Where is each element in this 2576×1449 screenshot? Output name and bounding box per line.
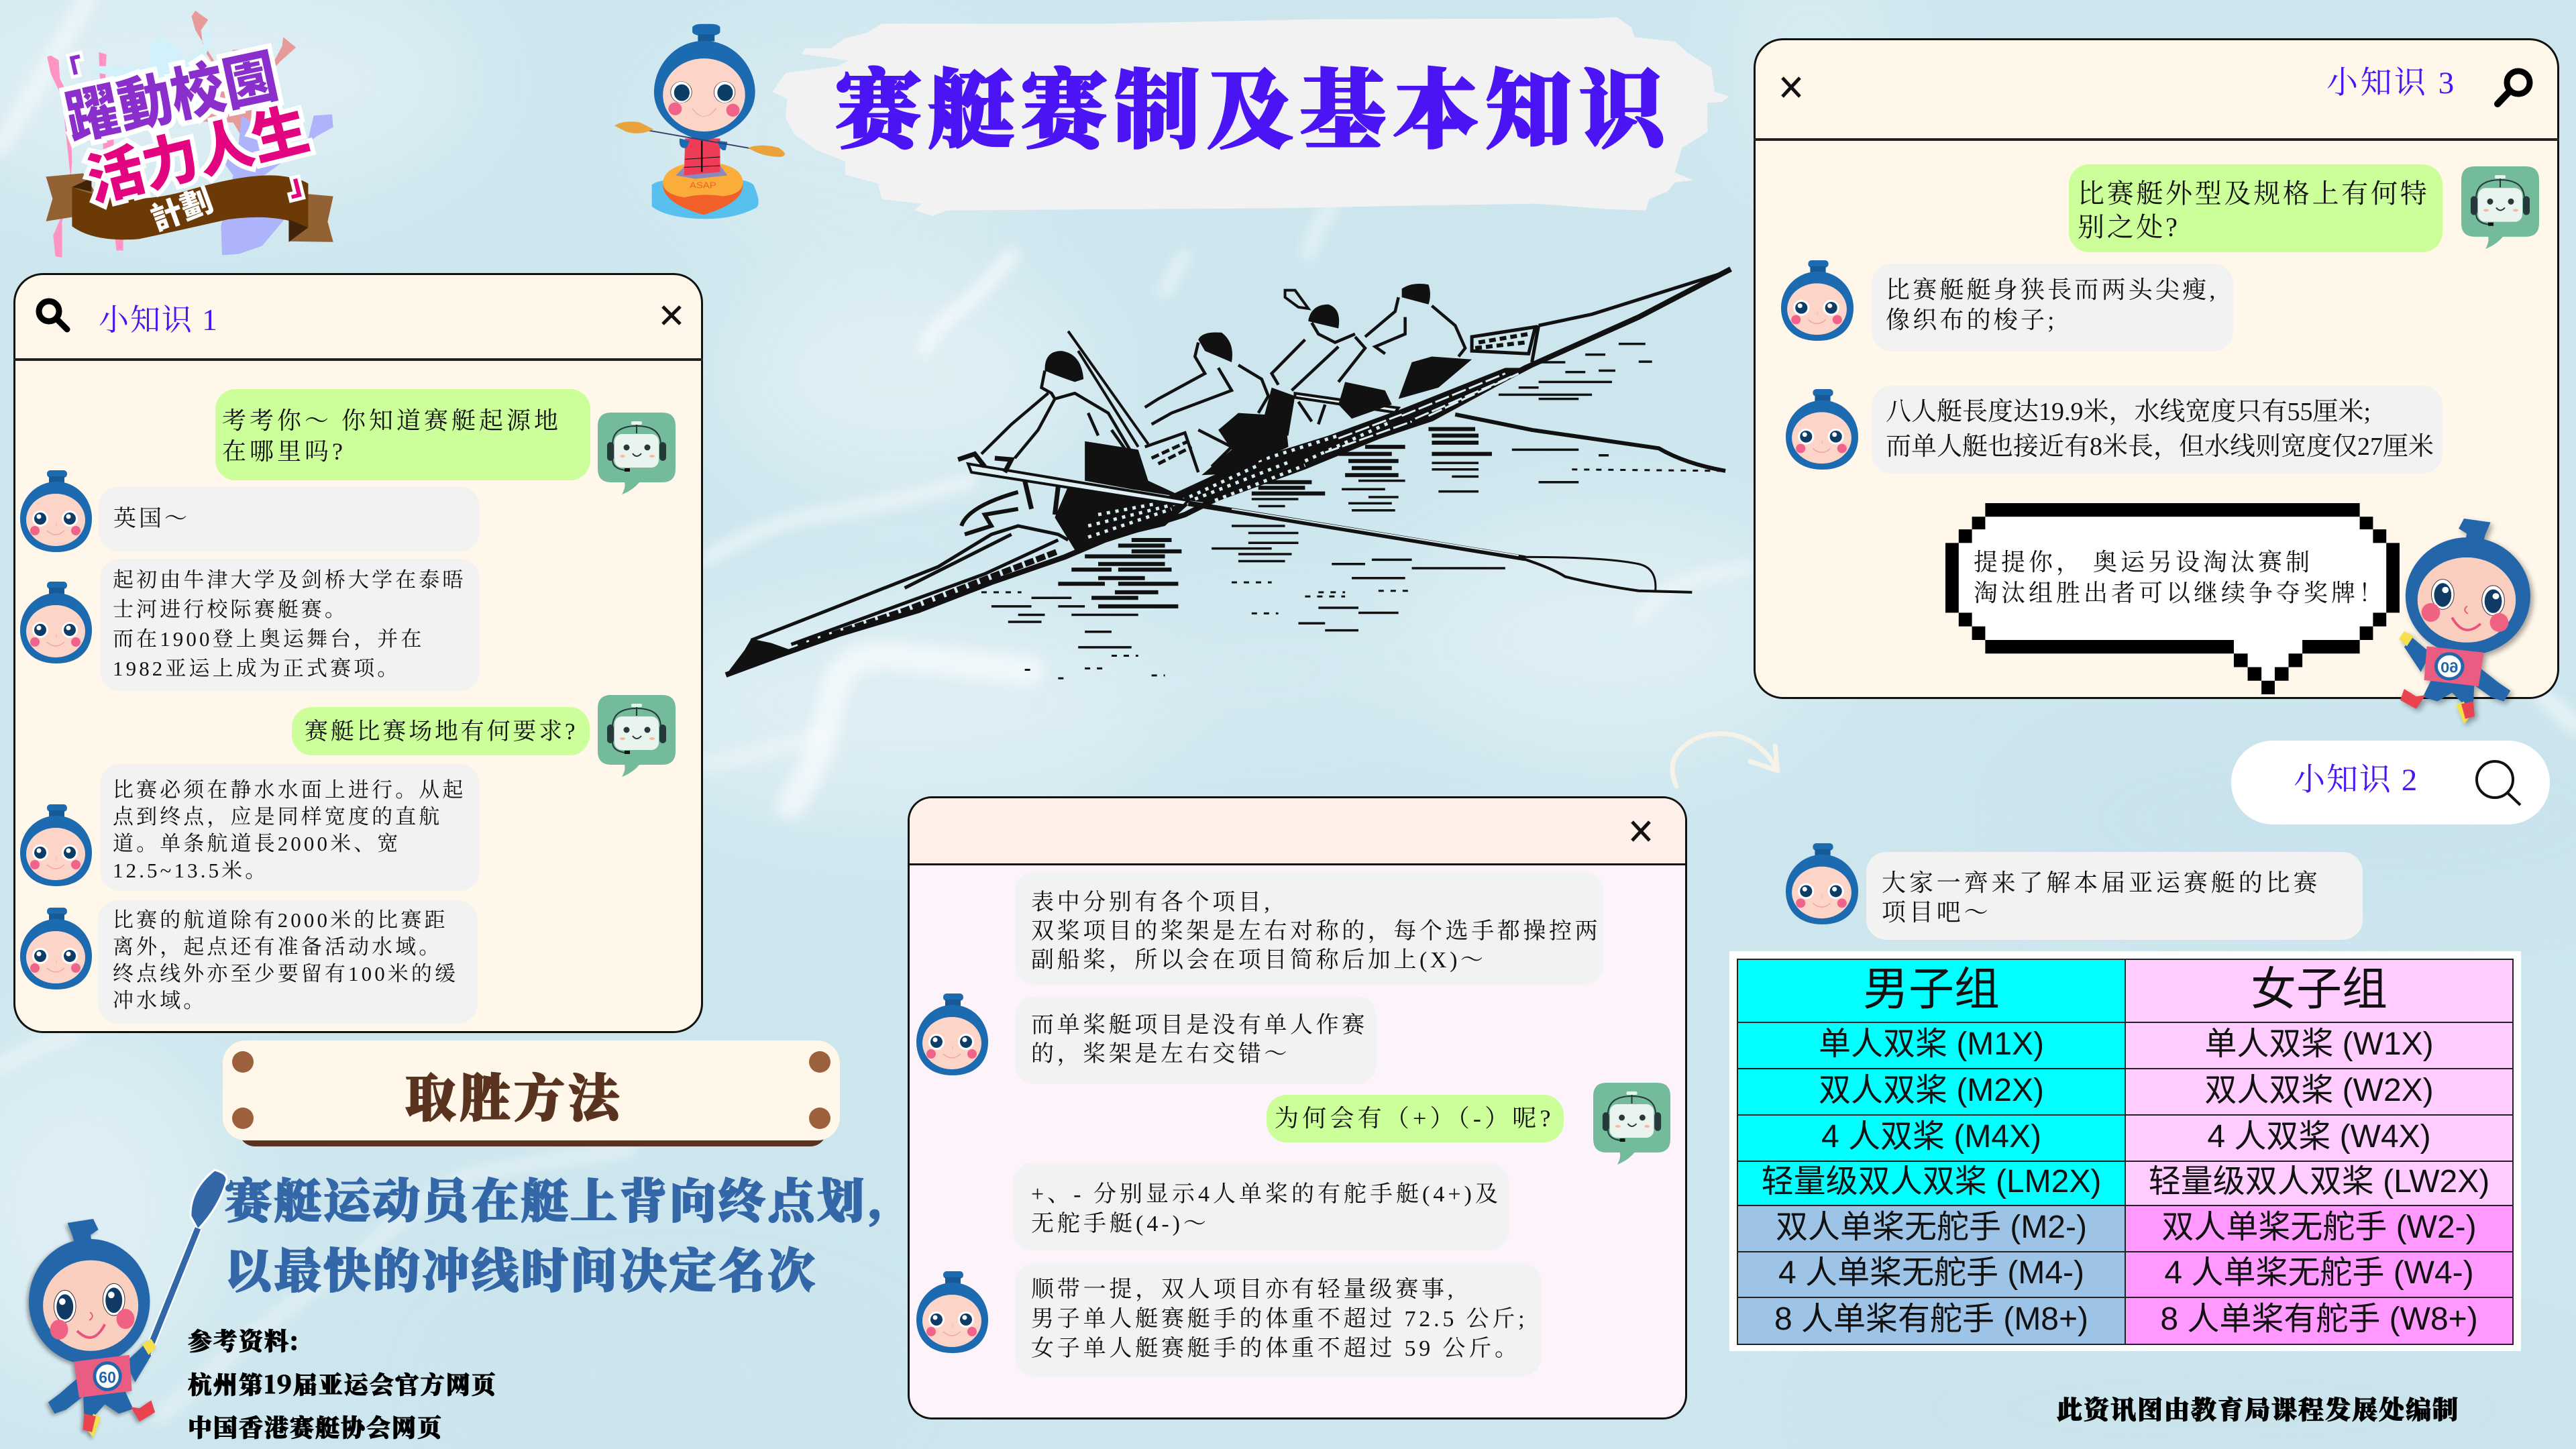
bubble: 轻量级: [1015, 1263, 1542, 1377]
panel: 取胜方法 heading plate: [223, 1040, 840, 1146]
rower 1: [958, 351, 1185, 515]
icon: avatar 1: [1781, 260, 1854, 341]
icon: avatar 1: [20, 470, 92, 552]
icon: kayak mascot: ASAP: [690, 180, 716, 191]
table: events by group: 双人单桨无舵手 (W2-): [2161, 1209, 2477, 1245]
water ripples far: [991, 344, 1652, 647]
answer bubble history: [100, 559, 480, 691]
bubble: 轻量级: 女子单人艇赛艇手的体重不超过 59 公斤。: [1031, 1336, 1521, 1361]
question bubble: 别之处?: [2078, 212, 2180, 242]
bubble: 有舵手: 无舵手艇(4-)～: [1031, 1212, 1210, 1236]
table: events by group: 女子组: [2251, 964, 2387, 1015]
bubble: 双桨: 副船桨，所以会在项目简称后加上(X)～: [1031, 948, 1487, 973]
table: events by group: 4 人单桨无舵手 (M4-): [1778, 1255, 2084, 1291]
logo opening bracket: 「: [51, 54, 87, 92]
logo closing bracket: 」: [284, 164, 321, 203]
answer bubble distance: 冲水域。: [113, 989, 207, 1012]
logo: 躍動校園 活力人生 計劃: [46, 11, 333, 258]
text: 赛艇运动员 statement: [225, 1163, 885, 1303]
table: events by group: 4 人双桨 (W4X): [2207, 1119, 2431, 1154]
heading: 小知识 3: 小知识 3: [2326, 66, 2457, 101]
bubble: 单桨: 的，桨架是左右交错～: [1031, 1042, 1290, 1067]
rower 3: [1258, 305, 1392, 439]
icon: search: [2493, 68, 2534, 107]
plate body: [223, 1040, 840, 1140]
logo ribbon text: 計劃: [146, 182, 217, 237]
title: 赛艇赛制及基本知识: [835, 42, 1672, 165]
question bubble: 比赛艇外型及规格上有何特: [2078, 178, 2429, 209]
question bubble 1: 考考你～ 你知道赛艇起源地: [222, 407, 561, 434]
answer bubble 英国: [99, 486, 480, 551]
plate shadow bar: [239, 1108, 826, 1146]
table: events by group: 4 人单桨无舵手 (W4-): [2164, 1255, 2474, 1291]
window header: [910, 798, 1685, 865]
answer bubble course: 道。单条航道長2000米、宽: [113, 832, 400, 855]
header divider: [13, 358, 703, 361]
bubble: 单桨: 而单桨艇项目是没有单人作赛: [1031, 1013, 1368, 1038]
text: references: 中国香港赛艇协会网页: [188, 1409, 443, 1444]
answer bubble distance: 终点线外亦至少要留有100米的缓: [113, 962, 458, 985]
icon: close: [1779, 75, 1803, 99]
bubble: 双桨: 表中分别有各个项目,: [1031, 890, 1273, 915]
answer bubble course: 点到终点，应是同样宽度的直航: [113, 805, 442, 828]
heading: 小知识 1: 小知识 1: [99, 303, 219, 337]
credit line: 此资讯图由教育局课程发展处编制: [2057, 1389, 2459, 1426]
table: events by group: 轻量级双人双桨 (LM2X): [1762, 1164, 2101, 1199]
logo line 1: 躍動校園: [60, 44, 283, 152]
bubble: table intro: 项目吧～: [1882, 899, 1992, 926]
text: references: 杭州第19届亚运会官方网页: [188, 1366, 497, 1401]
answer bubble history: 而在1900登上奥运舞台，并在: [113, 627, 424, 651]
icon: avatar 4: [20, 908, 92, 989]
answer bubble history: 1982亚运上成为正式赛项。: [113, 657, 400, 680]
answer bubble distance: 比赛的航道除有2000米的比赛距: [113, 908, 448, 932]
icon: kayak mascot: [614, 24, 785, 219]
rower 2: [1145, 332, 1289, 475]
table: events by group: 单人双桨 (M1X): [1819, 1026, 2044, 1061]
answer bubble history: 起初由牛津大学及剑桥大学在泰晤: [113, 568, 466, 592]
text: 赛艇运动员 statement: 赛艇运动员在艇上背向终点划,: [225, 1164, 885, 1232]
answer bubble course: 比赛必须在静水水面上进行。从起: [113, 778, 466, 802]
answer bubble course: [100, 764, 480, 891]
runner mascot: [29, 1219, 158, 1439]
table: events by group: [1729, 951, 2521, 1351]
table: events by group: 单人双桨 (W1X): [2204, 1026, 2434, 1061]
answer bubble distance: 离外，起点还有准备活动水域。: [113, 935, 442, 959]
heading: 小知识 2: 小知识 2: [2294, 763, 2418, 798]
icon: avatar 1: [916, 994, 988, 1075]
table: events by group: 双人双桨 (M2X): [1819, 1072, 2044, 1108]
question bubble: 为何会有（+）（-）呢?: [1275, 1105, 1554, 1132]
icon: avatar 3: [20, 804, 92, 886]
question bubble 1: [215, 389, 590, 480]
rower 4: [1365, 284, 1472, 399]
table: events by group: 8 人单桨有舵手 (M8+): [1774, 1301, 2088, 1337]
plate heading: 取胜方法: [405, 1058, 623, 1131]
answer bubble shape: 比赛艇艇身狭長而两头尖瘦,: [1886, 276, 2218, 303]
icon: robot 1: [598, 413, 676, 494]
hull: [726, 269, 1731, 675]
table: events by group: 轻量级双人双桨 (LW2X): [2149, 1164, 2489, 1199]
bubble: 轻量级: 顺带一提，双人项目亦有轻量级赛事,: [1031, 1277, 1456, 1302]
icon: avatar 2: [1786, 389, 1858, 470]
icon: avatar 2: [20, 582, 92, 663]
bubble: 有舵手: [1013, 1163, 1509, 1250]
illustration: rowing crew boat: [724, 267, 1732, 680]
table: events by group: 男子组: [1863, 964, 2000, 1015]
title background brush blob: [773, 17, 1729, 216]
answer bubble distance: [98, 900, 478, 1024]
panel: 小知识 explanation window: [908, 796, 1687, 1419]
question bubble 1: 在哪里吗?: [222, 438, 346, 465]
icon: avatar intro: [1786, 843, 1858, 924]
text: references: 参考资料:: [188, 1323, 299, 1357]
question bubble 2: [292, 707, 590, 755]
header divider: [908, 863, 1687, 865]
bubble: 有舵手: +、- 分别显示4人单桨的有舵手艇(4+)及: [1031, 1182, 1501, 1207]
answer bubble history: 士河进行校际赛艇赛。: [113, 598, 348, 621]
oars: [968, 464, 1188, 506]
answer bubble length: 而单人艇也接近有8米長，但水线则宽度仅27厘米: [1886, 433, 2434, 461]
bubble: 双桨: 双桨项目的桨架是左右对称的，每个选手都操控两: [1031, 919, 1601, 944]
question bubble: [1267, 1095, 1564, 1142]
arrow: curved white arrow: [1666, 726, 1782, 793]
icon: close: [659, 303, 684, 327]
icon: running mascot: [2398, 519, 2530, 725]
table: events by group: 双人双桨 (W2X): [2204, 1072, 2434, 1108]
table: events by group: 4 人双桨 (M4X): [1821, 1119, 2041, 1154]
bubble: 单桨: [1015, 996, 1377, 1084]
table: events by group: 双人单桨无舵手 (M2-): [1776, 1209, 2087, 1245]
plate rivets: [232, 1051, 830, 1129]
bubble: 轻量级: 男子单人艇赛艇手的体重不超过 72.5 公斤;: [1031, 1307, 1527, 1332]
text: 赛艇运动员 statement: 以最快的冲线时间决定名次: [225, 1234, 817, 1301]
pixel bubble shape: [1945, 503, 2400, 694]
icon: robot: [2461, 166, 2539, 249]
icon: robot: [1593, 1083, 1670, 1165]
answer bubble shape: [1872, 264, 2233, 352]
logo line 2: 活力人生: [81, 97, 315, 213]
answer bubble shape: 像织布的梭子;: [1886, 307, 2057, 333]
table: events by group: 8 人单桨有舵手 (W8+): [2160, 1301, 2478, 1337]
bubble: table intro: [1866, 852, 2363, 940]
icon: close: [1629, 819, 1653, 843]
icon: search outline: [2475, 759, 2521, 805]
oar: [29, 1169, 227, 1364]
answer bubble length: [1872, 386, 2443, 474]
question bubble: [2069, 164, 2443, 252]
icon: search: [36, 298, 70, 332]
answer bubble length: 八人艇長度达19.9米，水线宽度只有55厘米;: [1886, 398, 2371, 426]
icon: avatar 2: [916, 1271, 988, 1353]
icon: mascot with oar: [29, 1169, 227, 1439]
bubble: 双桨: [1015, 871, 1603, 985]
panel: 小知识 1 chat window: [13, 273, 703, 1033]
answer bubble course: 12.5~13.5米。: [113, 859, 268, 882]
callout text: 淘汰组胜出者可以继续争夺奖牌！: [1974, 580, 2386, 606]
water ripples near hull: [1058, 429, 1492, 606]
text: references: [188, 1319, 497, 1449]
logo silhouettes and ribbon: [46, 11, 333, 258]
panel: 小知识 3 chat window: [1754, 38, 2559, 699]
bubble: table intro: 大家一齊来了解本届亚运赛艇的比赛: [1882, 869, 2320, 896]
dark hull mass and mesh: [1055, 486, 1188, 550]
header divider: [1754, 138, 2559, 141]
answer bubble 英国: 英国～: [113, 506, 190, 531]
icon: robot 2: [598, 695, 676, 777]
callout text: [1974, 547, 2386, 608]
panel: 小知识 2 search pill: [2231, 741, 2550, 824]
question bubble 2: 赛艇比赛场地有何要求?: [305, 718, 578, 745]
callout: pixel speech bubble: [1945, 503, 2400, 694]
callout text: 提提你， 奥运另设淘汰赛制: [1974, 549, 2313, 576]
